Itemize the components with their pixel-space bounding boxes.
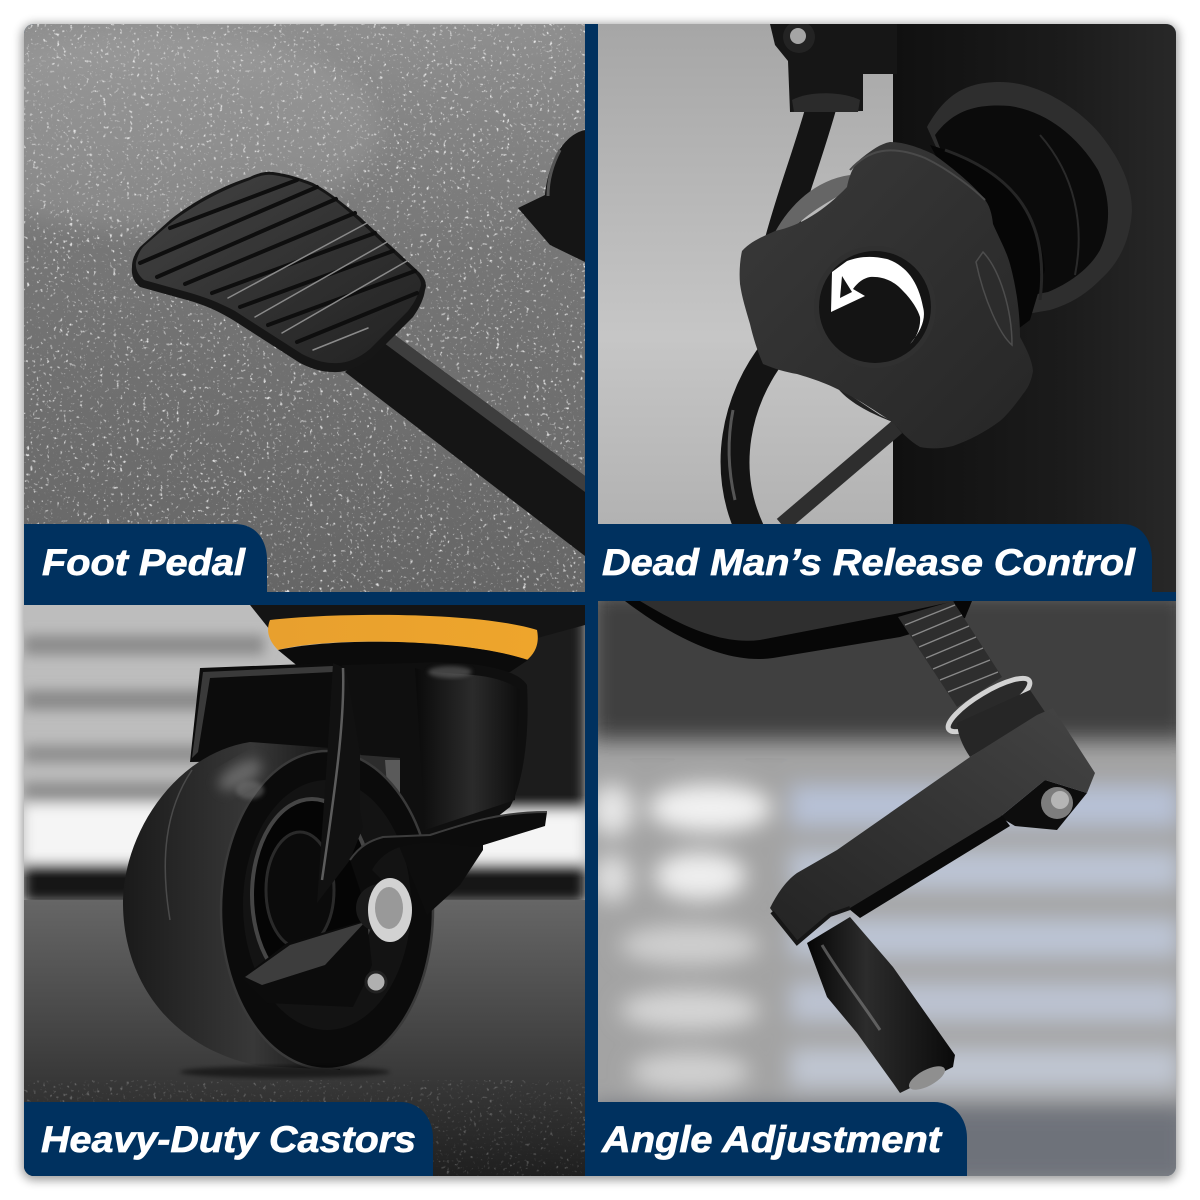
brake lever <box>242 812 547 1007</box>
label: foot pedal <box>24 524 267 592</box>
bracket <box>770 24 897 112</box>
cable hoop <box>729 90 826 530</box>
washer <box>946 676 1032 734</box>
icon: foot pedal <box>132 172 426 372</box>
castor fork housing <box>342 662 528 840</box>
grip <box>807 917 955 1093</box>
column <box>893 24 1176 592</box>
collar <box>957 690 1045 757</box>
icon: background castor <box>518 130 585 262</box>
knob back rim <box>775 175 850 232</box>
label: foot pedal: Foot Pedal <box>42 542 246 583</box>
top plate <box>250 605 585 640</box>
label: dead man's release control <box>598 524 1152 592</box>
label: dead man's release control: Dead Man’s Release Control <box>602 542 1136 583</box>
panel: foot pedal photo <box>0 24 585 592</box>
pedal stem <box>345 333 585 556</box>
label: heavy-duty castors: Heavy-Duty Castors <box>41 1119 416 1160</box>
panel: heavy-duty castors photo <box>24 605 585 1176</box>
icon: wheel <box>123 742 433 1070</box>
panel: angle adjustment photo <box>590 590 1190 1185</box>
threaded bolt <box>898 601 1002 707</box>
fork front plate <box>321 666 360 883</box>
label: angle adjustment: Angle Adjustment <box>601 1119 943 1160</box>
icon: release knob <box>740 142 1033 448</box>
fork back plate <box>190 663 345 762</box>
barrel <box>930 146 1038 328</box>
icon: rotate arrow badge <box>819 251 931 363</box>
bolt <box>356 884 376 930</box>
top plate <box>625 601 972 659</box>
collar flange <box>927 82 1132 314</box>
panel: dead man's release photo <box>598 21 1176 592</box>
label: heavy-duty castors <box>24 1102 433 1176</box>
icon: crank handle <box>770 708 1095 1094</box>
label: angle adjustment <box>598 1102 967 1176</box>
orange ring <box>268 615 538 660</box>
